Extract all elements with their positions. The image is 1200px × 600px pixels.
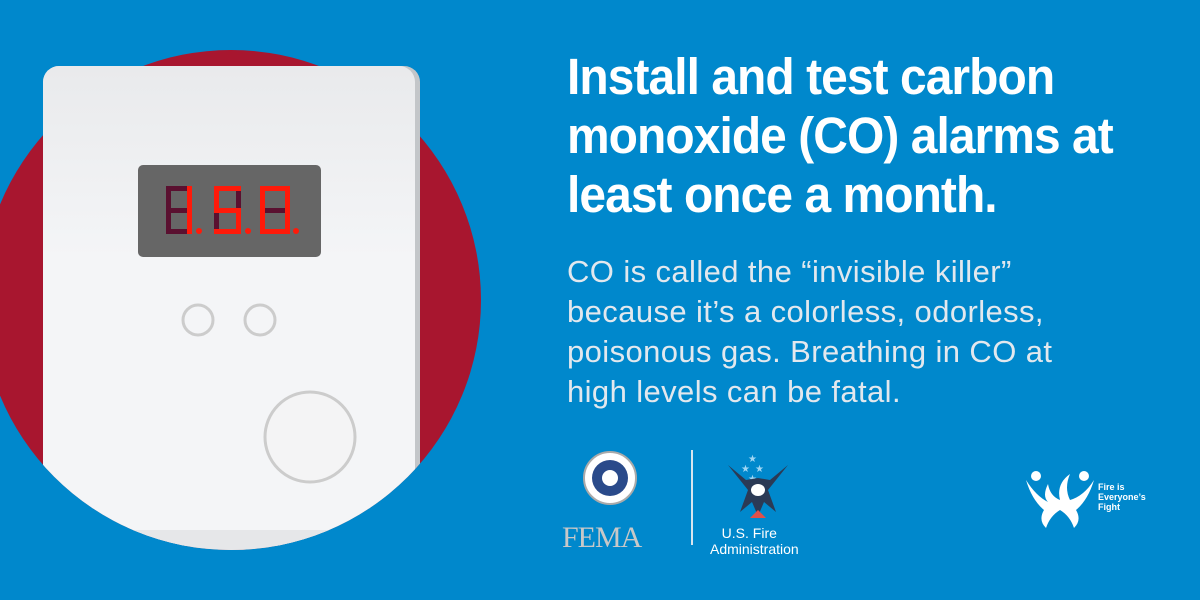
buttons bbox=[183, 305, 213, 335]
title: Install and test carbon bbox=[567, 48, 1054, 105]
logo: U.S. Fire Administration bbox=[710, 454, 799, 557]
logo: U.S. Fire Administration: ★ bbox=[755, 464, 764, 475]
logo: U.S. Fire Administration: U.S. Fire bbox=[722, 525, 777, 541]
divider bbox=[691, 450, 693, 545]
logo: U.S. Fire Administration: ★ bbox=[748, 474, 757, 485]
title: least once a month. bbox=[567, 166, 997, 223]
display bbox=[138, 165, 321, 257]
logo: Fire is Everyone's Fight bbox=[1026, 471, 1146, 528]
logo: U.S. Fire Administration: ★ bbox=[748, 454, 757, 465]
logo: Fire is Everyone's Fight: Fire is bbox=[1098, 482, 1125, 492]
body text: CO is called the “invisible killer” bbox=[567, 254, 1012, 289]
logo: Fire is Everyone's Fight: Everyone’s bbox=[1098, 492, 1146, 502]
red circle bbox=[0, 50, 481, 550]
title: monoxide (CO) alarms at bbox=[567, 107, 1113, 164]
logo: FEMA / DHS seal bbox=[562, 451, 642, 554]
logo: U.S. Fire Administration: ★ bbox=[741, 464, 750, 475]
body text bbox=[567, 254, 1052, 409]
illustration: CO alarm on red circle bbox=[0, 50, 481, 550]
body text: high levels can be fatal. bbox=[567, 374, 901, 409]
body text: because it’s a colorless, odorless, bbox=[567, 294, 1044, 329]
logo: U.S. Fire Administration: Administration bbox=[710, 541, 799, 557]
logo: Fire is Everyone's Fight: Fight bbox=[1098, 502, 1120, 512]
logo: FEMA / DHS seal: FEMA bbox=[562, 521, 641, 554]
body text: poisonous gas. Breathing in CO at bbox=[567, 334, 1052, 369]
alarm body bbox=[43, 66, 420, 590]
title bbox=[567, 48, 1114, 223]
test button bbox=[265, 392, 355, 482]
